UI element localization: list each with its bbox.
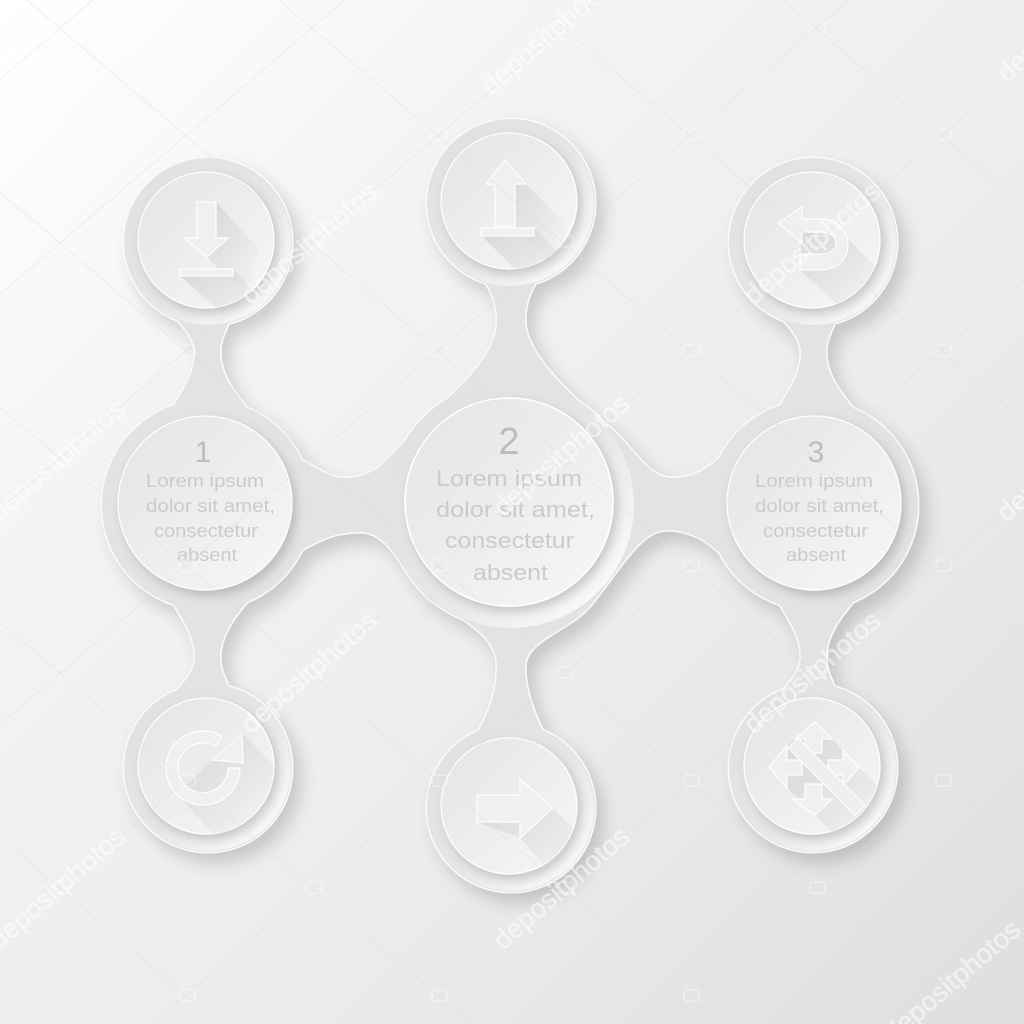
text block 3: consectetur (763, 521, 868, 541)
watermark text: depositphotos (235, 605, 383, 739)
text block 2 (436, 466, 595, 585)
text block 3: dolor sit amet, (755, 496, 884, 516)
watermark text: depositphotos (487, 388, 635, 522)
text block 1: consectetur (154, 521, 258, 541)
node: download icon (138, 172, 291, 325)
text block 2: consectetur (445, 528, 574, 553)
node: right arrow icon (440, 738, 594, 891)
watermark text: depositphotos (738, 176, 886, 310)
text block 1: absent (177, 545, 237, 565)
icon: upload arrow (480, 159, 556, 269)
icon: right arrow (476, 778, 573, 864)
number 2: 2 (498, 421, 520, 463)
icon: return arrow (777, 206, 874, 304)
text block 1: dolor sit amet, (146, 496, 275, 516)
node: return icon (744, 172, 896, 325)
node: upload icon (440, 132, 594, 286)
text block 1: Lorem ipsum (146, 471, 264, 491)
node: text circle 2 (388, 382, 634, 628)
icon: refresh arrow (166, 731, 278, 836)
number 3: 3 (808, 436, 824, 469)
node: move icon (744, 698, 896, 851)
watermark text: depositphotos (738, 605, 886, 739)
connected paper shape (102, 119, 918, 892)
icon: download arrow (180, 202, 251, 308)
text block 1 (146, 471, 275, 565)
watermark text: depositphotos (235, 176, 383, 310)
text block 3 (755, 471, 884, 565)
node: refresh icon (138, 698, 291, 851)
text block 3: absent (786, 545, 846, 565)
watermark text: depositphotos (487, 821, 635, 955)
text block 2: absent (473, 560, 548, 585)
node: text circle 1 (118, 416, 292, 590)
icon: move arrows with slash (768, 722, 877, 831)
text block 2: dolor sit amet, (436, 497, 595, 522)
text block 3: Lorem ipsum (755, 471, 873, 491)
node: text circle 3 (727, 416, 901, 590)
number 1: 1 (195, 436, 211, 469)
text block 2: Lorem ipsum (436, 466, 582, 491)
